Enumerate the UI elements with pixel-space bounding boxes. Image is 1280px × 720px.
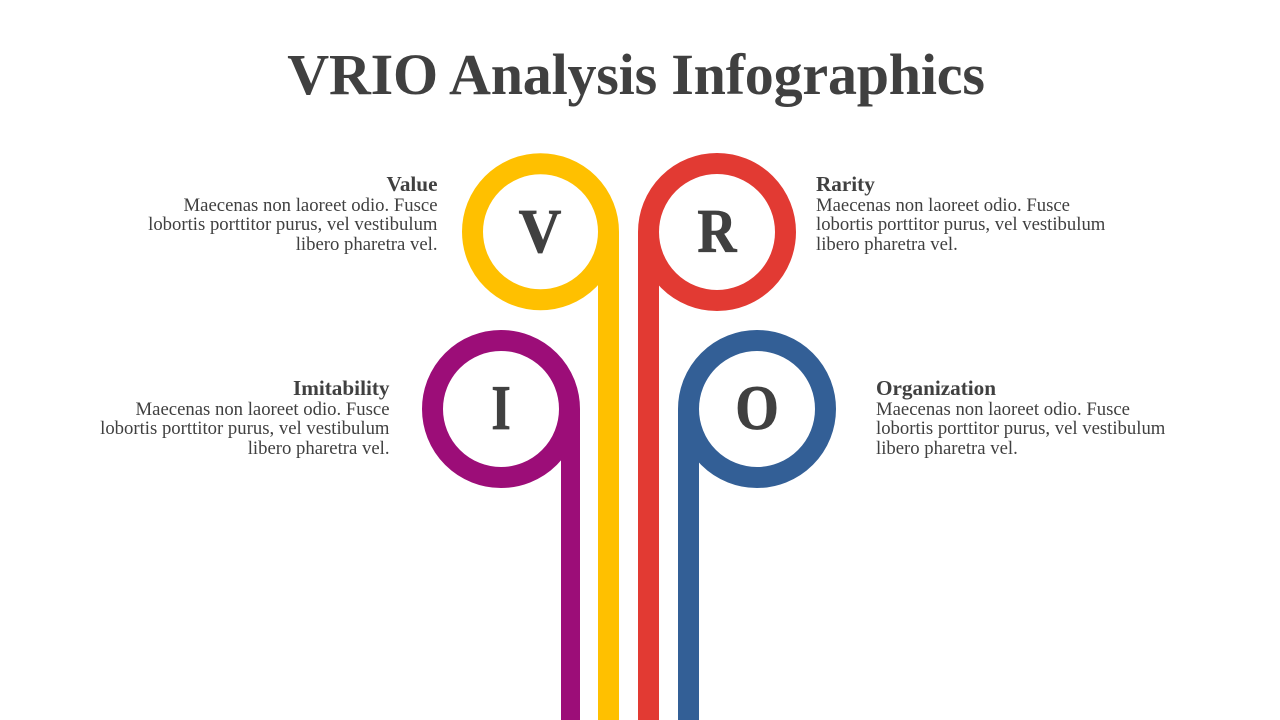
text block: value: Maecenas non laoreet odio. Fusce [184,195,438,216]
text block: organization: libero pharetra vel. [876,438,1018,459]
text block: imitability: Maecenas non laoreet odio. Fusce [136,399,390,420]
loop: value [472,164,608,720]
text block: value: lobortis porttitor purus, vel vestibulum [148,214,438,235]
text block: organization: Maecenas non laoreet odio. Fusce [876,399,1130,420]
loop: organization [688,340,826,720]
text block: imitability [100,376,390,459]
text block: imitability: Imitability [293,376,390,400]
text block: rarity: lobortis porttitor purus, vel vestibulum [816,214,1105,235]
loop: imitability [432,340,570,720]
letter R: R [697,196,737,266]
loop: rarity [648,164,786,720]
text block: value [148,172,438,255]
letter I: I [491,374,511,443]
text block: rarity: Maecenas non laoreet odio. Fusce [816,195,1070,216]
text block: rarity: libero pharetra vel. [816,234,958,255]
letter O: O [735,373,779,443]
text block: imitability: libero pharetra vel. [248,438,390,459]
text block: rarity [816,172,1105,255]
text block: rarity: Rarity [816,172,875,196]
text block: value: Value [386,172,438,196]
text block: organization [876,376,1165,459]
text block: imitability: lobortis porttitor purus, vel vestibulum [100,418,390,439]
text block: value: libero pharetra vel. [296,234,438,255]
text block: organization: lobortis porttitor purus, vel vestibulum [876,418,1165,439]
title: VRIO Analysis Infographics [287,42,985,107]
text block: organization: Organization [876,376,996,400]
letter V: V [519,197,561,266]
